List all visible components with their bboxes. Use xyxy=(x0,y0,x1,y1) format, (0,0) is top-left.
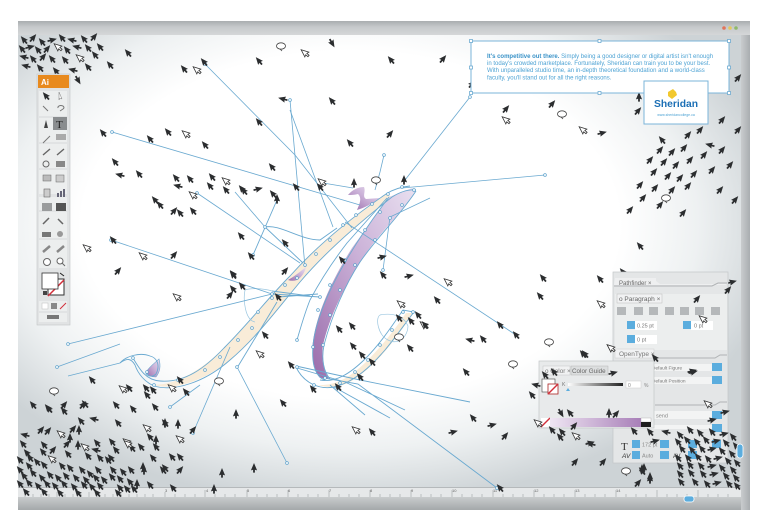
headline box with selection handles: in today's crowded marketplace. Fortunately, Sheridan can train you to be your best. xyxy=(487,61,710,67)
ruler numbers: 5 xyxy=(247,488,250,493)
pathfinder tab xyxy=(614,278,727,287)
cursors: top-left cluster xyxy=(16,31,286,86)
color panel: Color Guide xyxy=(572,368,606,375)
headline box with selection handles: With unparalleled studio time, an in-depth theoretical foundation and a world-class xyxy=(487,68,705,74)
color panel: K xyxy=(562,382,566,388)
opentype section: Default Position xyxy=(652,378,686,384)
ruler numbers: 7 xyxy=(329,488,332,493)
character section: Auto xyxy=(642,454,653,460)
ruler numbers: 11 xyxy=(493,488,498,493)
ruler numbers xyxy=(165,488,621,493)
right window bar xyxy=(741,35,750,510)
ruler numbers: 8 xyxy=(370,488,373,493)
cursors: scattered upper middle xyxy=(97,37,644,219)
Sheridan logo box xyxy=(644,81,708,124)
color panel: 0 xyxy=(628,383,631,389)
ruler numbers: 12 xyxy=(534,488,539,493)
cursors: over panels xyxy=(530,284,734,484)
opentype section xyxy=(615,349,727,384)
headline box with selection handles: It's competitive out there. Simply being a good designer or digital artist isn't enough xyxy=(487,54,713,60)
letter: purple and cream fills xyxy=(146,187,416,387)
letter: vector outlines and handle lines xyxy=(120,186,497,488)
opentype section: OpenType × xyxy=(619,351,655,358)
toolbar panel: Ai xyxy=(41,78,49,87)
cursors: bottom-left cluster xyxy=(14,399,257,499)
paragraph section: 0 pt xyxy=(637,338,647,344)
ruler numbers: 3 xyxy=(165,488,168,493)
character section: 172 pt xyxy=(642,442,658,448)
paragraph section: 0.25 pt xyxy=(637,324,654,330)
right panel stack xyxy=(613,272,728,463)
character section: send xyxy=(656,414,668,420)
ruler xyxy=(18,487,741,497)
paragraph section: 0 pt xyxy=(694,324,704,330)
ruler numbers: 6 xyxy=(288,488,291,493)
bottom window bar xyxy=(18,497,750,510)
window control dots xyxy=(722,26,738,30)
anchor points xyxy=(56,63,546,489)
color panel: % xyxy=(644,383,649,389)
paragraph section xyxy=(615,294,727,350)
opentype section: Default Figure xyxy=(652,366,682,372)
ruler numbers: 10 xyxy=(452,488,457,493)
Sheridan logo box: Sheridan xyxy=(654,99,698,110)
headline box with selection handles: faculty, you'll stand out for all the right reasons. xyxy=(487,76,612,82)
cursors: right cluster xyxy=(617,72,744,286)
Sheridan logo box: www.sheridancollege.ca xyxy=(657,113,695,117)
ruler ticks xyxy=(25,490,728,497)
character section xyxy=(621,402,727,460)
ruler numbers: 9 xyxy=(411,488,414,493)
headline box with selection handles xyxy=(470,40,730,94)
color panel xyxy=(539,361,654,428)
ruler numbers: 14 xyxy=(616,488,621,493)
character section: T xyxy=(621,441,628,453)
character section: AV xyxy=(621,453,631,460)
toolbar panel xyxy=(37,74,70,325)
ruler numbers: 4 xyxy=(206,488,209,493)
cursors: bottom-right cluster xyxy=(672,424,742,492)
scroll handles xyxy=(684,444,743,502)
long bezier handles xyxy=(57,64,545,463)
cursors: scattered middle xyxy=(42,171,653,494)
pathfinder tab: Pathfinder × xyxy=(619,281,652,287)
toolbar panel: T xyxy=(56,119,63,131)
paragraph section: o Paragraph × xyxy=(619,296,661,303)
ruler numbers: 13 xyxy=(575,488,580,493)
character section: AV xyxy=(673,454,681,460)
color panel: o Color × xyxy=(545,368,571,375)
